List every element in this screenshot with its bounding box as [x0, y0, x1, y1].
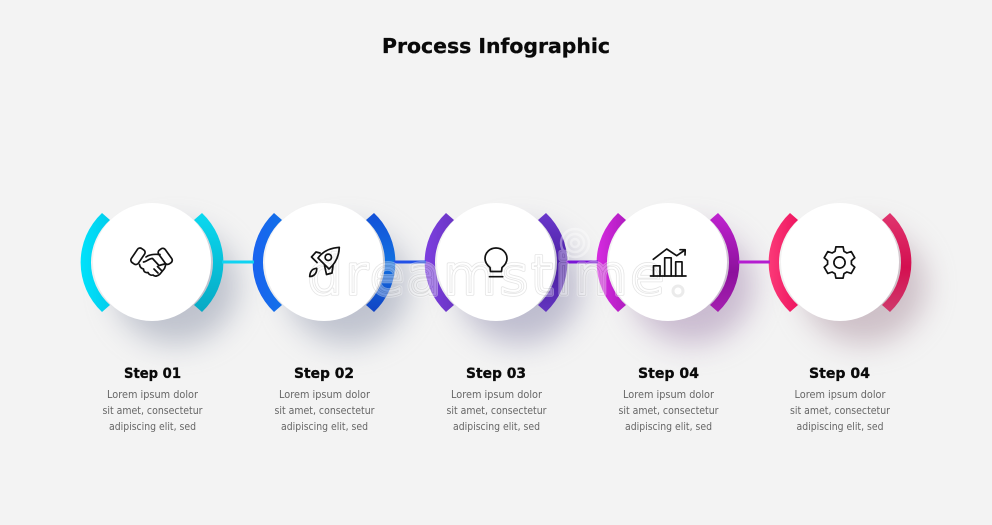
text: step 01: Step 01 — [124, 366, 181, 382]
text: step 04: Step 04 — [638, 366, 699, 382]
text: step 04 (fifth): Lorem ipsum dolor — [794, 389, 886, 401]
text: step 04 (fifth): Step 04 — [809, 366, 870, 382]
text: step 03: Step 03 — [466, 366, 526, 382]
text: step 02 — [274, 366, 375, 433]
icon: gear — [824, 247, 855, 278]
text: step 04 — [618, 366, 719, 433]
text: step 03: Lorem ipsum dolor — [451, 389, 543, 401]
connector lines — [222, 260, 770, 264]
text: step 04: sit amet, consectetur — [618, 405, 719, 417]
text: step 04 (fifth): sit amet, consectetur — [790, 405, 891, 417]
text: step 04: adipiscing elit, sed — [625, 421, 712, 433]
text: step 02: Step 02 — [294, 366, 354, 382]
icon: rocket — [310, 247, 339, 276]
watermark: dreamstime — [308, 244, 664, 307]
step 2 node — [253, 203, 410, 344]
icon: handshake — [130, 247, 173, 276]
text: step 04: Lorem ipsum dolor — [623, 389, 715, 401]
step 3 node — [425, 203, 582, 344]
title: Process Infographic — [382, 34, 610, 58]
text: step 01: sit amet, consectetur — [102, 405, 203, 417]
step 4 node — [597, 203, 754, 344]
text: step 01: adipiscing elit, sed — [109, 421, 196, 433]
text: step 02: Lorem ipsum dolor — [279, 389, 371, 401]
text: step 04 (fifth) — [790, 366, 891, 433]
icon: light bulb — [485, 248, 507, 277]
text: step 02: adipiscing elit, sed — [281, 421, 368, 433]
text: step 04 (fifth): adipiscing elit, sed — [796, 421, 884, 433]
text: step 03: adipiscing elit, sed — [453, 421, 540, 433]
watermark: dreamstime — [308, 244, 664, 307]
text: step 01: Lorem ipsum dolor — [107, 389, 199, 401]
watermark: dreamstime — [308, 244, 664, 307]
text: step 03 — [446, 366, 547, 433]
text: step 01 — [102, 366, 203, 433]
step 1 node — [81, 203, 238, 344]
icon: bar chart — [650, 249, 686, 276]
text: step 03: sit amet, consectetur — [446, 405, 547, 417]
text: step 02: sit amet, consectetur — [274, 405, 375, 417]
step 5 node — [769, 203, 926, 344]
